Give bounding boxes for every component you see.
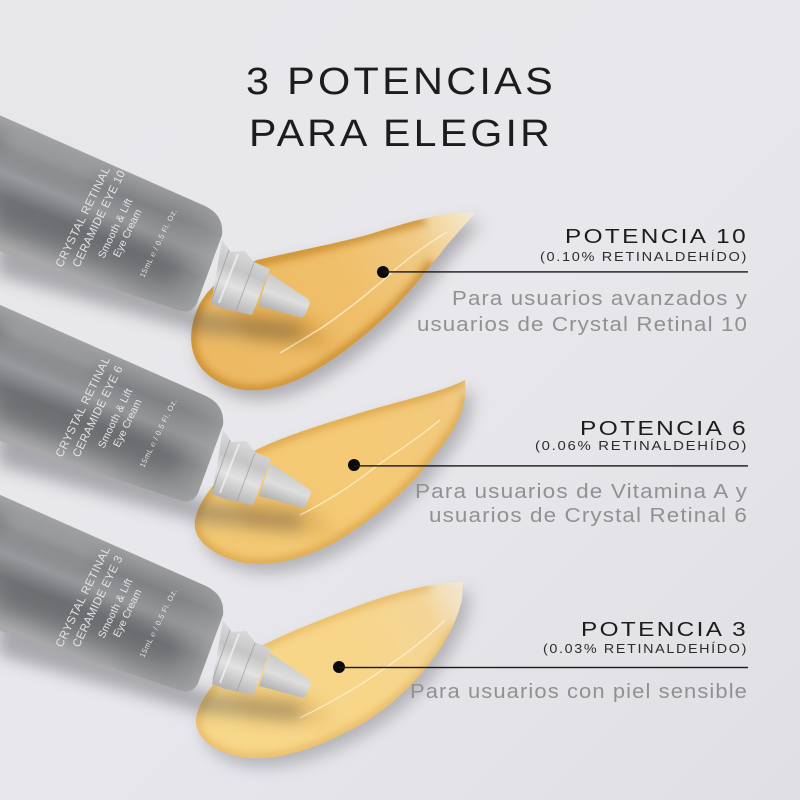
tube label text [54, 355, 179, 469]
heading: POTENCIA 3 [581, 618, 748, 641]
tube label text: 15mL ℮ / 0.5 Fl. Oz. [138, 588, 179, 659]
callout: potencia 10 [377, 225, 748, 336]
cream swatch: potencia 3 [196, 582, 470, 767]
tube label text: Eye Cream [111, 397, 145, 449]
cream swatch: potencia 10 [191, 213, 482, 399]
tube label text: Smooth & Lift [96, 577, 135, 640]
description [415, 481, 748, 527]
tube label text: CERAMIDE EYE 10 [71, 169, 128, 269]
callout marker and line [333, 661, 748, 673]
concentration: (0.06% RETINALDEHÍDO) [535, 438, 748, 453]
tube label text: CERAMIDE EYE 6 [71, 364, 126, 459]
tube label text [54, 545, 179, 659]
tube: crystal retinal eye 10 [0, 114, 310, 340]
tube label text: CERAMIDE EYE 3 [71, 554, 126, 649]
concentration: (0.03% RETINALDEHÍDO) [543, 641, 748, 656]
callout: potencia 6 [348, 417, 748, 527]
description: Para usuarios avanzados y [452, 288, 748, 310]
tube label text: CRYSTAL RETINAL [54, 355, 113, 459]
heading: POTENCIA 6 [580, 417, 748, 440]
callout marker and line [377, 266, 748, 278]
tube label text: Smooth & Lift [96, 387, 135, 450]
tube: crystal retinal eye 6 [0, 304, 311, 530]
title [246, 61, 556, 155]
description: Para usuarios con piel sensible [410, 681, 748, 703]
tube label text: CRYSTAL RETINAL [54, 165, 113, 269]
title: PARA ELEGIR [249, 113, 553, 155]
cream swatch: potencia 6 [195, 380, 472, 573]
tube label text: 15mL ℮ / 0.5 Fl. Oz. [138, 398, 179, 469]
title: 3 POTENCIAS [246, 61, 556, 103]
concentration: (0.10% RETINALDEHÍDO) [540, 249, 748, 264]
callout marker and line [348, 459, 748, 471]
description: usuarios de Crystal Retinal 10 [417, 314, 748, 336]
description [417, 288, 748, 336]
description: Para usuarios de Vitamina A y [415, 481, 748, 503]
callout: potencia 3 [333, 618, 748, 703]
tube: crystal retinal eye 3 [0, 494, 311, 720]
tube label text: Eye Cream [111, 207, 145, 259]
tube label text: 15mL ℮ / 0.5 Fl. Oz. [138, 208, 179, 279]
tube label text: CRYSTAL RETINAL [54, 545, 113, 649]
tube label text: Eye Cream [111, 587, 145, 639]
tube label text [54, 165, 179, 279]
tube label text: Smooth & Lift [96, 197, 135, 260]
heading: POTENCIA 10 [565, 225, 748, 248]
description: usuarios de Crystal Retinal 6 [429, 505, 748, 527]
